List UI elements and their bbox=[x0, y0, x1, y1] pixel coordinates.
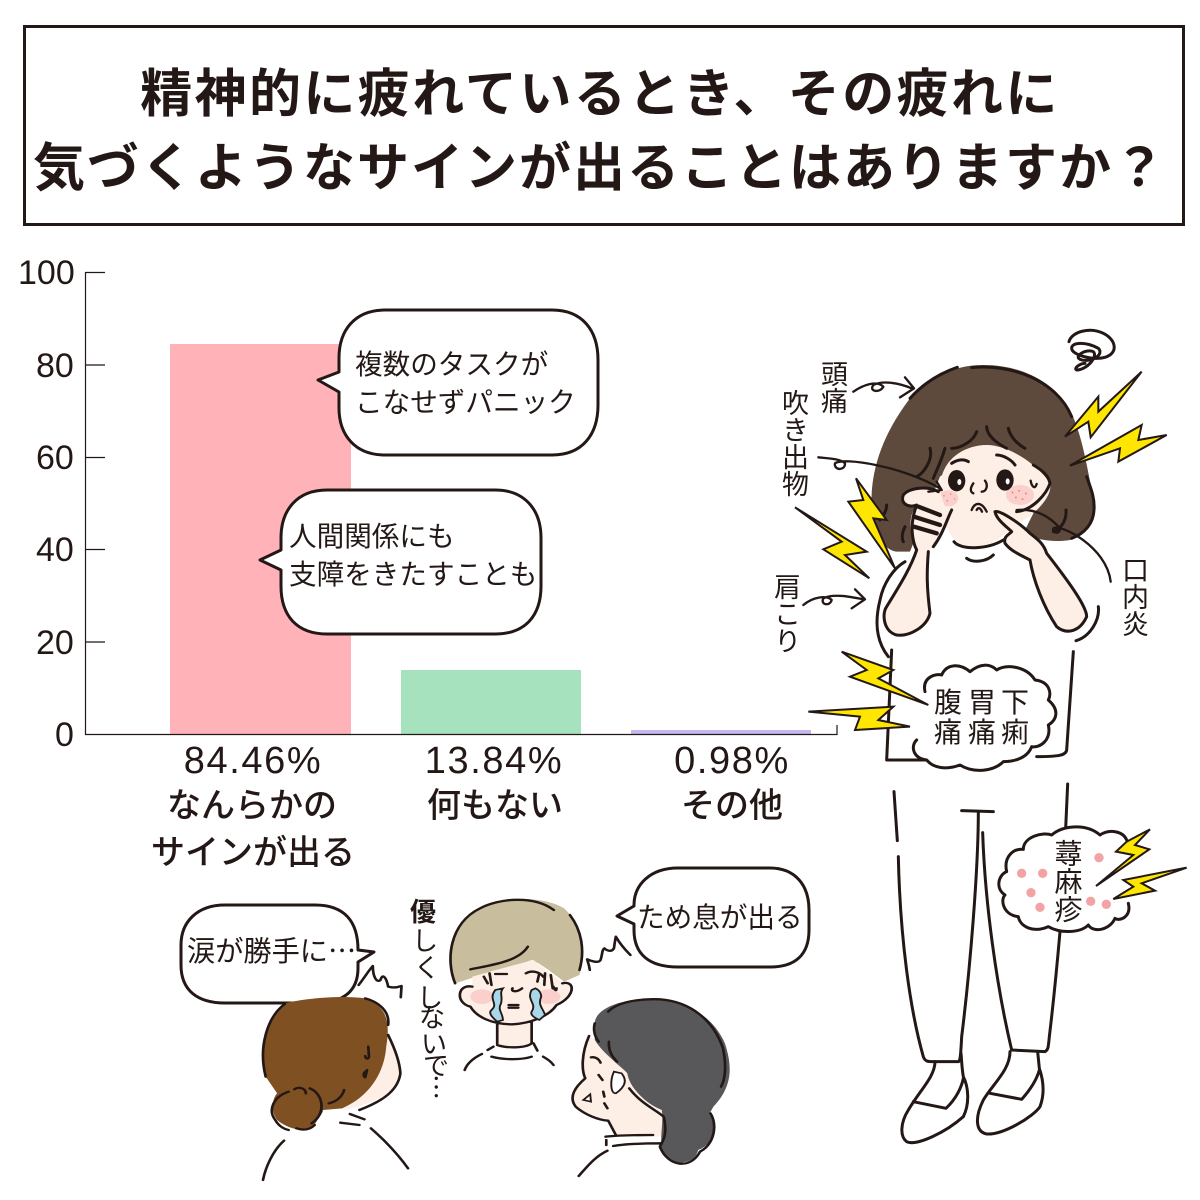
bolt: left lower bbox=[795, 507, 869, 578]
label: hives: 蕁麻疹 bbox=[1052, 839, 1082, 923]
right arm and pointing finger bbox=[995, 512, 1087, 631]
vertical caption: な bbox=[419, 1003, 445, 1033]
bolt: hives lower bbox=[1113, 868, 1187, 899]
cloud label: abdominal pain, stomach ache, diarrhea: 胃 bbox=[968, 687, 996, 718]
squiggle: brown hair person bbox=[359, 966, 402, 997]
vertical caption: い bbox=[421, 1029, 447, 1059]
bolt: top right bbox=[1065, 372, 1142, 437]
cloud label: abdominal pain, stomach ache, diarrhea: 痢 bbox=[1001, 717, 1029, 748]
y axis labels: 40 bbox=[36, 531, 74, 569]
callout: multitasking panic bbox=[318, 310, 598, 455]
bolt: stomach lower bbox=[808, 707, 910, 730]
callout: multitasking panic: 複数のタスクが bbox=[355, 349, 548, 380]
face bbox=[880, 427, 1066, 561]
label: breakouts: 吹き出物 bbox=[778, 389, 808, 497]
bolt: stomach upper bbox=[842, 652, 928, 705]
y axis labels bbox=[18, 254, 75, 754]
vertical caption: 優 bbox=[410, 897, 436, 927]
woman with stress symptoms bbox=[795, 330, 1167, 770]
vertical caption: … bbox=[418, 1074, 456, 1100]
hair bbox=[872, 365, 1094, 552]
vertical caption: く bbox=[414, 953, 440, 983]
category label: some sign: なんらかの bbox=[167, 787, 337, 825]
title: 精神的に疲れているとき、その疲れに bbox=[140, 66, 1060, 124]
arrow: mouth ulcer bbox=[1017, 510, 1111, 582]
arrow: headache bbox=[853, 377, 914, 397]
three people talking bbox=[263, 899, 730, 1180]
squiggle: blonde person bbox=[587, 937, 630, 970]
category label: some sign: 84.46% bbox=[184, 740, 322, 782]
bar: nothing 13.84% bbox=[401, 670, 581, 734]
label: mouth ulcer: 口内炎 bbox=[1118, 556, 1148, 637]
chart axes bbox=[85, 272, 837, 734]
bar chart bbox=[18, 254, 837, 872]
category label: some sign bbox=[151, 740, 355, 872]
shoes bbox=[902, 1052, 1043, 1143]
hair strands bbox=[880, 427, 1066, 542]
callout: multitasking panic: こなせずパニック bbox=[355, 387, 576, 418]
trousers bbox=[894, 784, 1068, 1062]
woman lower body bbox=[894, 784, 1187, 1143]
callout: relationships: 人間関係にも bbox=[289, 521, 455, 552]
icon: dizzy swirl bbox=[1069, 330, 1114, 370]
cloud: stomach symptoms bbox=[913, 665, 1056, 770]
cloud label: abdominal pain, stomach ache, diarrhea: 下 bbox=[1001, 687, 1029, 718]
dark hair person in profile bbox=[573, 999, 730, 1176]
crying blonde person bbox=[450, 899, 583, 1070]
category label: other: 0.98% bbox=[674, 740, 790, 782]
category label: some sign: サインが出る bbox=[151, 834, 355, 872]
eyes and brows bbox=[948, 455, 1037, 512]
vertical caption: で bbox=[423, 1051, 449, 1081]
category label: other bbox=[674, 740, 790, 825]
cloud label: abdominal pain, stomach ache, diarrhea: 痛 bbox=[968, 717, 996, 748]
callout: relationships bbox=[260, 490, 541, 634]
torso outline bbox=[877, 562, 1099, 760]
callout: relationships: 支障をきたすことも bbox=[289, 559, 537, 590]
arrow: breakouts bbox=[818, 457, 942, 492]
y axis labels: 100 bbox=[18, 254, 75, 292]
vertical caption bbox=[410, 897, 456, 1100]
y axis labels: 0 bbox=[55, 716, 74, 754]
vertical caption: し bbox=[412, 926, 438, 956]
hives spots bbox=[1017, 853, 1111, 912]
callout: tears bbox=[181, 905, 374, 1003]
label: stiff shoulders: 肩こり bbox=[770, 573, 800, 654]
callout: sighing: ため息が出る bbox=[637, 902, 803, 933]
arrow: stiff shoulders bbox=[803, 589, 865, 608]
callout: sighing bbox=[617, 868, 809, 967]
cloud label: abdominal pain, stomach ache, diarrhea bbox=[934, 687, 1029, 748]
y axis labels: 20 bbox=[36, 624, 74, 662]
cloud label: abdominal pain, stomach ache, diarrhea: 痛 bbox=[934, 717, 962, 748]
vertical caption: し bbox=[417, 983, 443, 1013]
title bbox=[24, 26, 1184, 224]
label: headache: 頭痛 bbox=[817, 360, 848, 414]
cloud label: abdominal pain, stomach ache, diarrhea: 腹 bbox=[934, 687, 962, 718]
callout: tears: 涙が勝手に… bbox=[187, 929, 356, 970]
category label: nothing: 13.84% bbox=[425, 740, 563, 782]
category label: other: その他 bbox=[681, 787, 783, 825]
left arm and hand bbox=[884, 487, 952, 635]
cheeks bbox=[938, 485, 1034, 506]
category label: nothing: 何もない bbox=[427, 787, 563, 825]
y axis labels: 80 bbox=[36, 347, 74, 385]
cloud: hives bbox=[999, 827, 1129, 931]
bar: other 0.98% bbox=[631, 730, 811, 734]
bar: some sign 84.46% bbox=[170, 344, 351, 734]
category label: nothing bbox=[425, 740, 563, 825]
y axis labels: 60 bbox=[36, 439, 74, 477]
bolt: right bbox=[1070, 425, 1167, 466]
brown hair person from behind bbox=[263, 997, 408, 1180]
bolt: left upper bbox=[848, 478, 895, 568]
bolt: hives upper bbox=[1096, 829, 1150, 886]
title: 気づくようなサインが出ることはありますか？ bbox=[33, 140, 1167, 198]
